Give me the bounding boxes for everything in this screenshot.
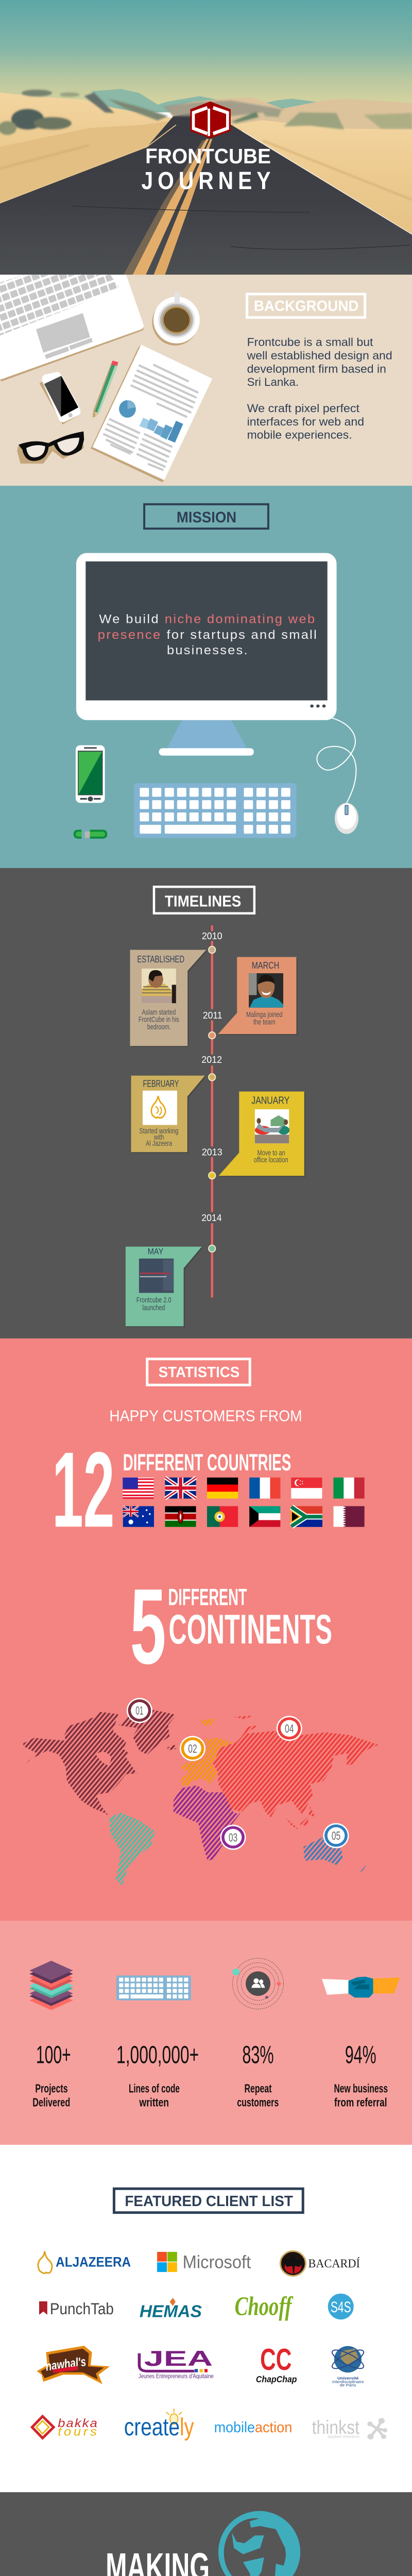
heading: background bbox=[247, 294, 365, 317]
heading: timelines bbox=[154, 887, 254, 913]
panel: key numbers bbox=[0, 1921, 412, 2145]
logo: ChapChap: ChapChap bbox=[256, 2374, 297, 2384]
icon: handshake bbox=[322, 1977, 400, 1997]
logo: Nawhal's: nawhal's bbox=[44, 2354, 87, 2374]
logo: Mobile Action: mobile bbox=[214, 2419, 255, 2435]
logo: Mobile Action bbox=[214, 2419, 292, 2435]
text block: mission statement: niche dominating web bbox=[165, 613, 315, 626]
panel: background bbox=[0, 275, 412, 486]
stat: 5 continents bbox=[130, 1567, 332, 1687]
years: 2011 bbox=[203, 1010, 222, 1021]
flags bbox=[123, 1478, 365, 1527]
region: Europe bbox=[180, 1719, 234, 1785]
bushes and dunes bbox=[0, 90, 412, 200]
flag: Singapore bbox=[291, 1478, 322, 1499]
flag: UK bbox=[165, 1478, 196, 1499]
logo: JEA: JEA bbox=[144, 2347, 213, 2371]
stat: referral: from referral bbox=[334, 2096, 387, 2109]
stat: projects: 100+ bbox=[36, 2041, 71, 2069]
text block: mission statement: for startups and small bbox=[166, 629, 317, 642]
map: world continents bbox=[23, 1698, 379, 1886]
flag: South Africa bbox=[291, 1506, 322, 1527]
card: february: with bbox=[153, 1133, 164, 1141]
icon: layers bbox=[29, 1961, 73, 2010]
flag: Kenya bbox=[165, 1506, 196, 1527]
years: 2010 bbox=[202, 931, 222, 941]
logo: Mobile Action: action bbox=[255, 2419, 292, 2435]
logo: JEA: Jeunes Entrepreneurs d'Aquitaine bbox=[139, 2373, 214, 2380]
card: march: MARCH bbox=[252, 960, 279, 971]
logo: Bacardi bbox=[280, 2251, 360, 2277]
region: Asia bbox=[213, 1716, 379, 1830]
logo: Universite Interdisciplinaire de Paris: de Paris bbox=[340, 2383, 356, 2387]
text block: mission statement bbox=[98, 613, 317, 657]
marker: 01: 01 bbox=[135, 1704, 144, 1717]
heading: background: BACKGROUND bbox=[254, 298, 358, 314]
flag: Australia bbox=[123, 1506, 154, 1527]
card: may bbox=[126, 1247, 203, 1327]
stat: referral: New business bbox=[334, 2082, 388, 2095]
card: established: FrontCube in his bbox=[139, 1015, 179, 1024]
card: january: office location bbox=[254, 1156, 288, 1164]
stat: lines of code bbox=[116, 2041, 199, 2109]
card: established bbox=[130, 950, 208, 1047]
card: established: ESTABLISHED bbox=[137, 954, 184, 964]
years: 2012 bbox=[201, 1055, 222, 1065]
years bbox=[201, 931, 222, 1223]
logo: Bakka Tours: tours bbox=[58, 2426, 97, 2438]
heading: featured client list bbox=[114, 2189, 303, 2213]
icon: orbit with people bbox=[232, 1958, 284, 2009]
text block: mission statement: businesses. bbox=[167, 644, 248, 657]
logo: S4S: S4S bbox=[331, 2298, 351, 2316]
heading: featured client list: FEATURED CLIENT LIST bbox=[125, 2194, 293, 2210]
logo: Al Jazeera flame bbox=[143, 1091, 177, 1125]
icon: keyboard bbox=[134, 783, 297, 838]
logo: Thinkst: applied research bbox=[328, 2434, 359, 2439]
subheading: happy customers: HAPPY CUSTOMERS FROM bbox=[109, 1408, 302, 1425]
text block: background copy: development firm based in bbox=[247, 363, 386, 376]
card: february: Al Jazeera bbox=[146, 1139, 173, 1147]
region: Africa bbox=[174, 1785, 241, 1861]
stat: projects: Delivered bbox=[32, 2096, 70, 2109]
marker: 03: 03 bbox=[229, 1831, 237, 1844]
text block: background copy: well established design and bbox=[246, 349, 392, 362]
marker: 05: 05 bbox=[332, 1829, 340, 1842]
stat: lines of code: written bbox=[139, 2096, 169, 2109]
heading: timelines: TIMELINES bbox=[165, 892, 241, 910]
card: january: JANUARY bbox=[251, 1095, 289, 1107]
stat: referral: 94% bbox=[345, 2041, 376, 2069]
icon: globe bbox=[218, 2511, 300, 2576]
logo: Microsoft bbox=[157, 2252, 251, 2272]
icon: mobile phone bbox=[76, 745, 105, 803]
text block: background copy: We craft pixel perfect bbox=[247, 402, 359, 415]
logo: Nawhal's bbox=[37, 2346, 110, 2384]
text block: mission statement: presence bbox=[98, 629, 160, 642]
logo: ChapChap: CC bbox=[260, 2343, 291, 2377]
stat: repeat customers bbox=[237, 2041, 279, 2109]
stat: 5 continents: DIFFERENT bbox=[168, 1584, 247, 1610]
card: february bbox=[131, 1076, 206, 1153]
icon: glasses bbox=[17, 431, 84, 464]
screenshot: Frontcube 2.0 site bbox=[139, 1259, 174, 1293]
flag: Qatar bbox=[333, 1506, 365, 1527]
stat: repeat customers: 83% bbox=[242, 2041, 274, 2069]
icon: mouse with cable bbox=[317, 717, 358, 834]
logo: Al Jazeera: ALJAZEERA bbox=[56, 2255, 131, 2269]
marker: 02 bbox=[180, 1736, 205, 1761]
logo: Frontcube cube bbox=[190, 101, 231, 138]
icon: smartphone bbox=[40, 372, 80, 425]
stat: repeat customers: Repeat bbox=[244, 2082, 272, 2095]
region: South America bbox=[109, 1812, 155, 1886]
card: may: Frontcube 2.0 bbox=[136, 1296, 171, 1304]
stat: 12 countries: 12 bbox=[52, 1430, 114, 1550]
photo: Malinga bbox=[249, 973, 283, 1008]
card: january: Move to an bbox=[257, 1148, 285, 1157]
card: established: Aslam started bbox=[142, 1008, 176, 1016]
logo: Al Jazeera bbox=[38, 2251, 131, 2273]
logo: PunchTab bbox=[39, 2300, 114, 2318]
icon: monitor bbox=[76, 553, 337, 756]
icon: report document bbox=[91, 345, 212, 482]
flag: Portugal bbox=[207, 1506, 238, 1527]
title: JOURNEY bbox=[141, 167, 271, 195]
photo: Aslam bbox=[142, 969, 176, 1003]
heading: statistics: STATISTICS bbox=[159, 1364, 239, 1381]
text block: background copy bbox=[246, 336, 392, 442]
flag: Kuwait bbox=[249, 1506, 280, 1527]
stat: lines of code: Lines of code bbox=[129, 2082, 180, 2095]
timeline dots bbox=[209, 946, 215, 1252]
heading: statistics bbox=[147, 1359, 250, 1385]
logo: Universite Interdisciplinaire de Paris bbox=[330, 2346, 366, 2387]
years: 2013 bbox=[202, 1147, 222, 1158]
stat: 5 continents: 5 bbox=[130, 1567, 166, 1687]
panel: timelines bbox=[0, 868, 412, 1338]
marker: 04: 04 bbox=[285, 1722, 294, 1735]
text block: background copy: mobile experiences. bbox=[247, 429, 352, 442]
card: established: bedroom. bbox=[147, 1023, 171, 1031]
flag: USA bbox=[123, 1478, 153, 1499]
region: Australia bbox=[303, 1837, 367, 1874]
logo: Creately: ly bbox=[180, 2413, 194, 2441]
text block: background copy: Sri Lanka. bbox=[247, 376, 299, 388]
logo: Thinkst: thinkst bbox=[312, 2417, 359, 2438]
panel: featured clients bbox=[0, 2145, 412, 2492]
logo: S4S bbox=[328, 2294, 354, 2319]
marker: 01 bbox=[127, 1698, 152, 1723]
heading: mission: MISSION bbox=[177, 510, 236, 526]
icon: pencil bbox=[93, 361, 118, 418]
logo: Bakka Tours: bakka bbox=[58, 2417, 97, 2430]
flag: France bbox=[249, 1478, 280, 1499]
marker: 03 bbox=[220, 1825, 246, 1850]
logo: Hemas: HEMAS bbox=[140, 2302, 202, 2321]
card: may: launched bbox=[143, 1303, 165, 1312]
text block: background copy: interfaces for web and bbox=[247, 415, 364, 428]
title bbox=[141, 144, 271, 195]
card: february: FEBRUARY bbox=[143, 1078, 179, 1089]
text block: mission statement: We build bbox=[99, 613, 159, 626]
logo: JEA bbox=[139, 2347, 214, 2380]
stat: referral bbox=[334, 2041, 388, 2109]
icon: laptop bbox=[0, 275, 144, 381]
marker: 04 bbox=[277, 1716, 302, 1741]
stat: 12 countries: DIFFERENT COUNTRIES bbox=[123, 1449, 291, 1476]
card: march: Malinga joined bbox=[246, 1010, 282, 1019]
card: may: MAY bbox=[148, 1247, 164, 1257]
years: 2014 bbox=[201, 1213, 222, 1223]
logo: ChapChap bbox=[256, 2343, 297, 2384]
icon: coffee cup bbox=[152, 292, 200, 346]
card: february: Started working bbox=[139, 1127, 178, 1135]
flag: Germany bbox=[207, 1478, 238, 1499]
slogan text bbox=[104, 2545, 317, 2576]
photo: office bbox=[255, 1109, 289, 1143]
card: march bbox=[218, 957, 298, 1035]
icon: USB stick bbox=[74, 830, 107, 839]
stat: lines of code: 1,000,000+ bbox=[116, 2041, 199, 2069]
stat: projects: Projects bbox=[35, 2082, 68, 2095]
stat: 12 countries bbox=[52, 1430, 291, 1550]
logo: Bakka Tours bbox=[32, 2416, 97, 2438]
marker: 05 bbox=[323, 1823, 349, 1848]
title: FRONTCUBE bbox=[145, 144, 271, 168]
flag: Italy bbox=[333, 1478, 365, 1499]
logo: Microsoft: Microsoft bbox=[183, 2252, 251, 2272]
logo: Creately: create bbox=[124, 2413, 180, 2441]
panel: mission bbox=[0, 486, 412, 868]
text block: background copy: Frontcube is a small but bbox=[247, 336, 373, 349]
stat: projects bbox=[32, 2041, 71, 2109]
logo: Universite Interdisciplinaire de Paris: Université bbox=[337, 2376, 359, 2380]
panel: hero photo bbox=[0, 0, 412, 275]
logo: Bacardi: BACARDÍ bbox=[308, 2257, 360, 2270]
timeline axis bbox=[200, 925, 225, 1298]
panel: slogan bbox=[0, 2492, 412, 2576]
card: march: the team bbox=[253, 1018, 276, 1026]
marker: 02: 02 bbox=[188, 1742, 197, 1755]
logo: Universite Interdisciplinaire de Paris: Interdisciplinaire bbox=[332, 2380, 364, 2384]
logo: PunchTab: PunchTab bbox=[50, 2300, 114, 2318]
panel: statistics bbox=[0, 1338, 412, 1921]
stat: repeat customers: customers bbox=[237, 2096, 279, 2109]
logo: Chooff: Chooff bbox=[235, 2292, 294, 2321]
region: North America bbox=[23, 1710, 176, 1816]
card: january bbox=[218, 1092, 305, 1177]
icon: keyboard small bbox=[116, 1976, 191, 2001]
heading: mission bbox=[144, 504, 268, 529]
